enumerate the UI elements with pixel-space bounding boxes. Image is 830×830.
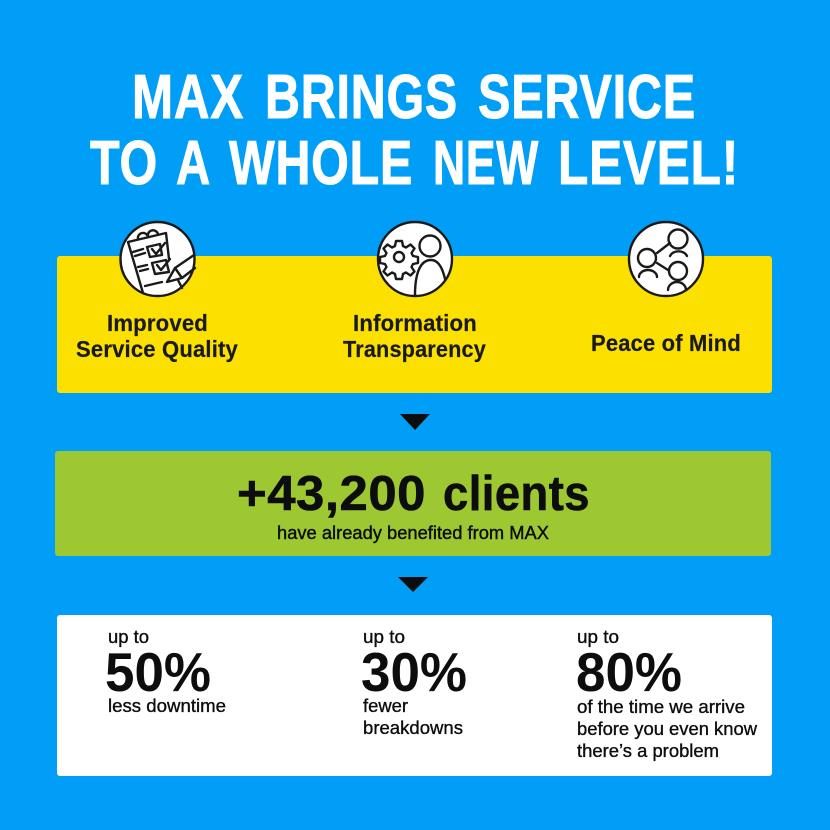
panel: benefits (57, 222, 772, 393)
client count (237, 467, 590, 521)
label: information transparency: Transparency (343, 336, 486, 362)
label: improved service quality (76, 310, 238, 362)
stat: 50%: up to (108, 627, 149, 647)
stat: 30%: 30% (361, 641, 467, 703)
title: SERVICE (478, 63, 696, 132)
title: TO (90, 129, 158, 198)
title: LEVEL! (558, 129, 739, 198)
title (90, 63, 739, 198)
benefit: improved service quality (76, 222, 238, 362)
label: improved service quality: Improved (107, 310, 208, 336)
title: NEW (433, 129, 539, 198)
icon: connected people (629, 222, 703, 296)
label: peace of mind: Peace of Mind (591, 330, 741, 356)
benefit: information transparency (343, 222, 486, 362)
stat: 80% (576, 627, 758, 761)
title: WHOLE (229, 129, 413, 198)
icon: checklist and pen (120, 222, 195, 296)
panel: clients (55, 451, 771, 556)
panel: stats (57, 615, 772, 776)
arrow: down to stats (398, 577, 428, 592)
stat: 30%: breakdowns (363, 718, 463, 738)
arrow: down to clients (400, 414, 430, 430)
stat: 80%: up to (577, 627, 619, 647)
title: MAX (132, 63, 244, 132)
stat: 30%: fewer (363, 696, 408, 716)
benefit: peace of mind (591, 222, 741, 356)
client count: clients (443, 467, 590, 521)
label: improved service quality: Service Quality (76, 336, 238, 362)
stat: 80%: before you even know (577, 719, 758, 739)
stat: 80%: there’s a problem (577, 741, 719, 761)
stat: 50%: 50% (105, 641, 211, 703)
client caption: have already benefited from MAX (277, 523, 549, 543)
stat: 30% (361, 627, 467, 738)
label: information transparency: Information (353, 310, 477, 336)
icon: gear and person (378, 222, 452, 296)
stat: 50%: less downtime (108, 696, 226, 716)
stat: 30%: up to (363, 627, 405, 647)
stat: 80%: of the time we arrive (577, 697, 745, 717)
label: information transparency (343, 310, 486, 362)
title: BRINGS (265, 63, 458, 132)
stat: 80%: 80% (576, 641, 682, 703)
title: A (176, 129, 211, 198)
stat: 50% (105, 627, 226, 716)
client count: +43,200 (237, 467, 426, 521)
